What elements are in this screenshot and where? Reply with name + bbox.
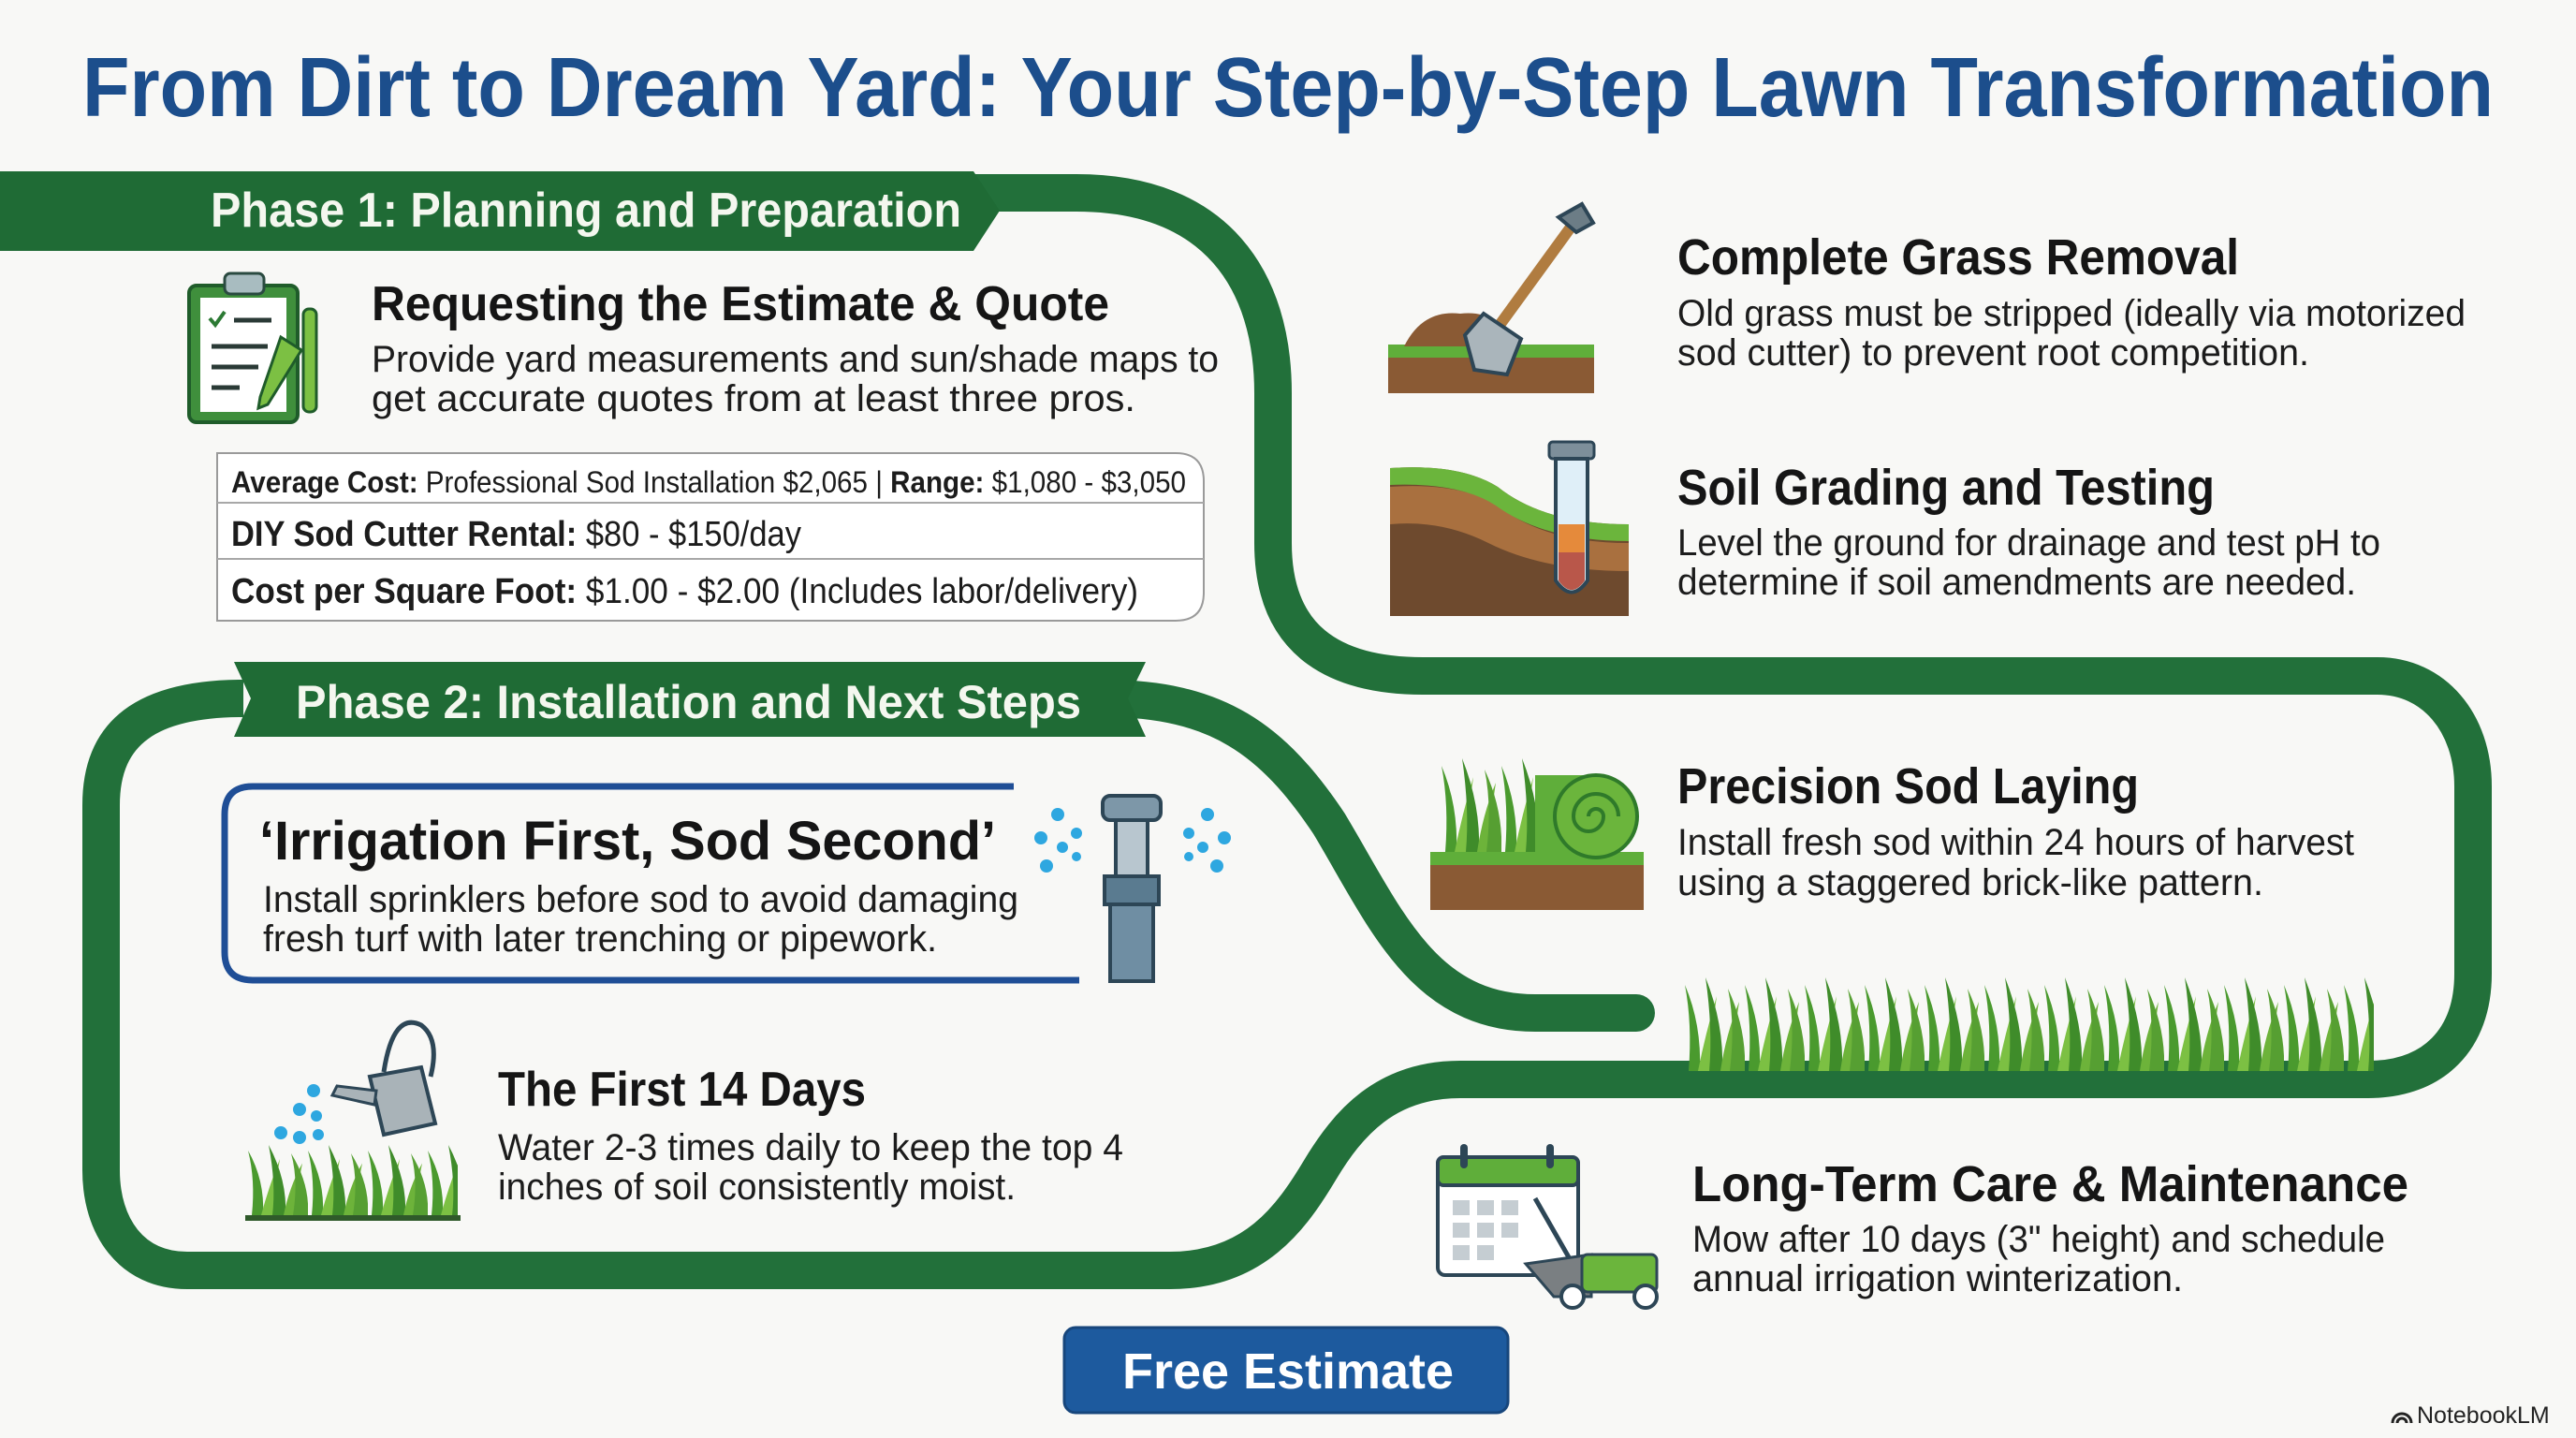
step: requesting estimate: Provide yard measurements and sun/shade maps to (372, 339, 1219, 380)
step: first 14 days: The First 14 Days (498, 1063, 866, 1117)
icon: sod roll (1430, 758, 1644, 910)
banner: phase 1: Phase 1: Planning and Preparation (211, 183, 961, 238)
step: first 14 days: Water 2-3 times daily to keep the top 4 (498, 1127, 1123, 1168)
step: precision sod laying: using a staggered brick-like pattern. (1677, 862, 2263, 903)
cost table: DIY Sod Cutter Rental: $80 - $150/day (231, 515, 801, 554)
icon: shovel (1388, 204, 1594, 393)
cost table: Average Cost: Professional Sod Installation $2,065 | Range: $1,080 - $3,050 (231, 465, 1186, 499)
step: precision sod laying: Precision Sod Laying (1677, 758, 2139, 814)
path track: main (101, 193, 2473, 1270)
step: soil grading (1677, 460, 2380, 603)
icon: watering can and grass (245, 1022, 461, 1221)
icon: soil grading with test tube (1390, 442, 1629, 616)
step: long-term care: Mow after 10 days (3" height) and schedule (1692, 1219, 2385, 1260)
icon: calendar and mower (1438, 1144, 1657, 1308)
banner: phase 1 (0, 171, 1000, 251)
step: long-term care: Long-Term Care & Maintenance (1692, 1156, 2408, 1212)
step: requesting estimate: Requesting the Estimate & Quote (372, 277, 1109, 331)
step: requesting estimate: get accurate quotes from at least three pros. (372, 378, 1135, 419)
banner: phase 2 (234, 662, 1146, 737)
step: requesting estimate (372, 277, 1219, 419)
icon: sprinkler (1034, 796, 1231, 981)
callout: irrigation first: ‘Irrigation First, Sod Second’ (259, 811, 996, 872)
callout: irrigation first: fresh turf with later trenching or pipework. (263, 918, 937, 960)
step: complete grass removal: Old grass must be stripped (ideally via motorized (1677, 293, 2466, 334)
button: free estimate: Free Estimate (1122, 1343, 1454, 1400)
step: first 14 days (498, 1063, 1123, 1208)
step: long-term care: annual irrigation winterization. (1692, 1258, 2183, 1299)
cost table: Cost per Square Foot: $1.00 - $2.00 (Includes labor/delivery) (231, 572, 1138, 611)
watermark: NotebookLM (2417, 1402, 2550, 1429)
step: first 14 days: inches of soil consistently moist. (498, 1167, 1016, 1208)
step: complete grass removal (1677, 229, 2466, 374)
grass strip (1685, 977, 2374, 1071)
step: soil grading: Level the ground for drainage and test pH to (1677, 522, 2380, 564)
cost table (217, 453, 1204, 621)
step: long-term care (1692, 1156, 2408, 1299)
banner: phase 2: Phase 2: Installation and Next Steps (296, 676, 1081, 728)
path track: phase 2 branch (1105, 698, 1636, 1013)
step: soil grading: determine if soil amendments are needed. (1677, 562, 2356, 603)
callout: irrigation first (225, 786, 1079, 980)
step: soil grading: Soil Grading and Testing (1677, 460, 2215, 516)
icon: clipboard (189, 273, 316, 422)
step: precision sod laying: Install fresh sod within 24 hours of harvest (1677, 822, 2354, 863)
button: free estimate (1064, 1328, 1508, 1413)
step: precision sod laying (1677, 758, 2354, 903)
step: complete grass removal: sod cutter) to prevent root competition. (1677, 332, 2309, 374)
callout: irrigation first: Install sprinklers before sod to avoid damaging (263, 879, 1018, 920)
step: complete grass removal: Complete Grass Removal (1677, 229, 2239, 286)
